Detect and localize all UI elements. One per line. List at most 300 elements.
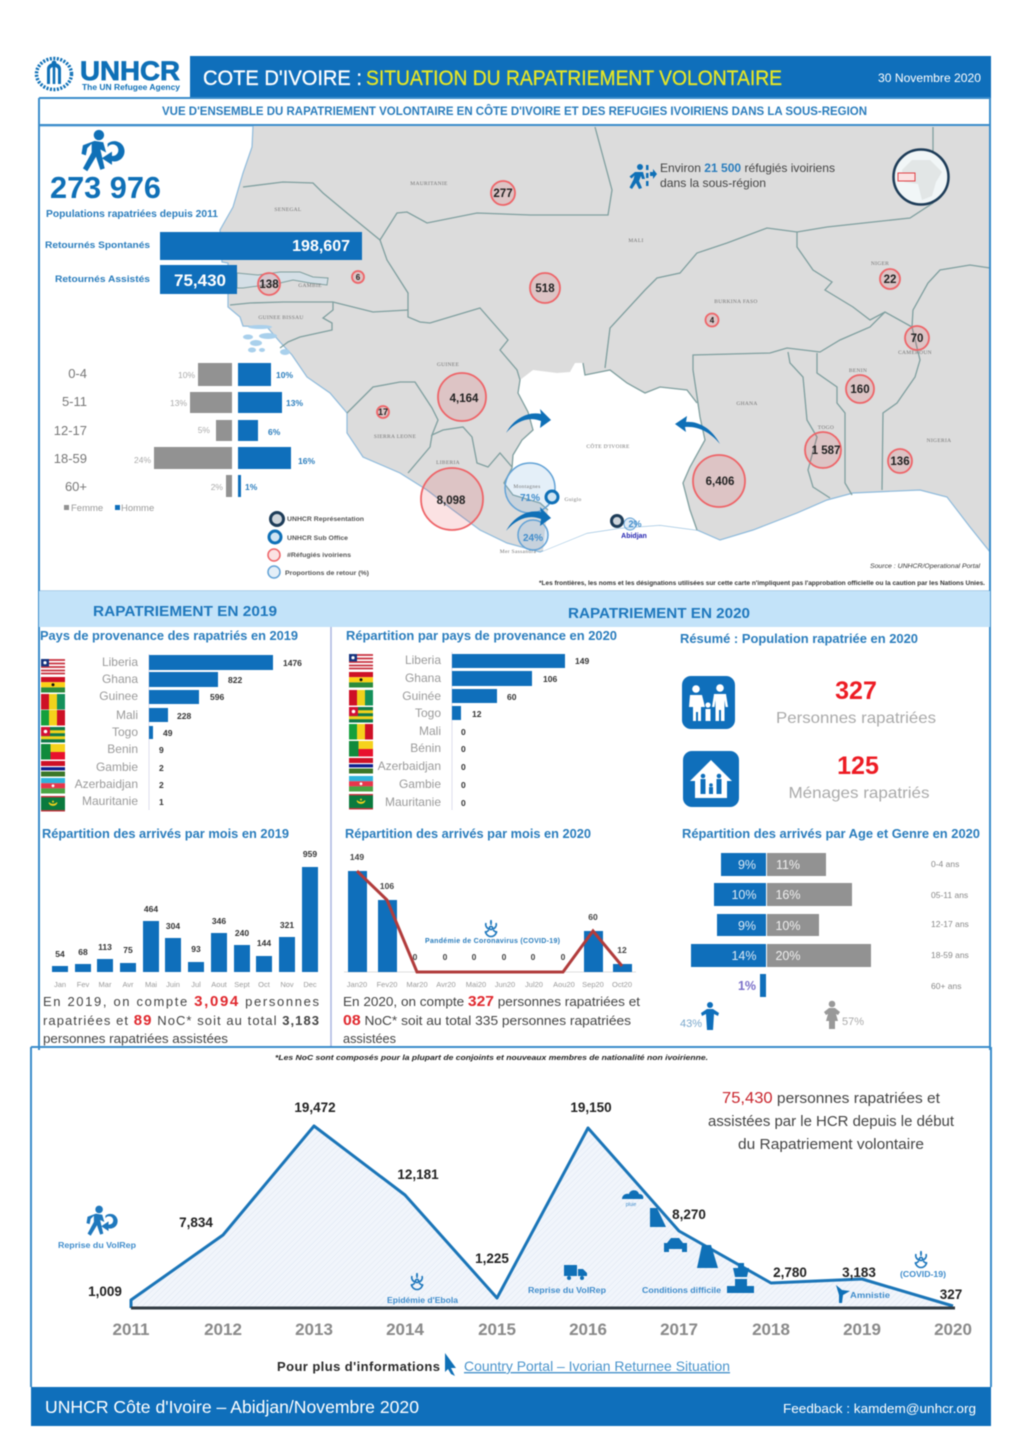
year labels: 2019 [843, 1320, 881, 1339]
area [131, 1126, 953, 1308]
callout: refugees in the sub-region: dans la sous-région [660, 176, 766, 190]
value labels: 1,009 [88, 1284, 122, 1299]
value labels: 2,780 [773, 1265, 807, 1280]
percent labels: 1% [738, 979, 756, 993]
percent labels: 16% [298, 456, 315, 466]
country labels: GAMBIE [298, 283, 322, 289]
year labels: 2015 [478, 1320, 516, 1339]
value labels: 8,270 [672, 1207, 706, 1222]
arrows: return flows [506, 409, 720, 531]
bubble values: 22 [884, 274, 896, 286]
map legend [268, 512, 369, 578]
icon: boat in flood [727, 1263, 754, 1293]
return proportion bubbles [505, 463, 647, 550]
bar chart: 12 [472, 709, 482, 719]
panel: arrivals by age and gender 2020: Répartition des arrivés par Age et Genre en 2020 [682, 826, 980, 841]
title: SITUATION DU RAPATRIEMENT VOLONTAIRE [366, 67, 782, 90]
bar chart [52, 849, 318, 989]
bar chart: Sep20 [582, 980, 604, 989]
icon: returnee walker [82, 130, 125, 171]
country labels: GHANA [736, 401, 758, 407]
event: COVID [900, 1251, 946, 1279]
callout: refugees in the sub-region: Environ 21 500 réfugiés ivoiriens [660, 161, 835, 175]
percent labels [731, 858, 801, 993]
title: COTE D'IVOIRE : [203, 67, 362, 90]
bar chart: 93 [191, 944, 201, 954]
male share [680, 1002, 719, 1030]
percent labels [134, 370, 315, 492]
panel: arrivals by month 2020 [343, 826, 640, 1046]
female bars [154, 363, 232, 497]
country names: Azerbaidjan [75, 777, 138, 791]
bar chart: 1 [159, 797, 164, 807]
bar chart: 2 [159, 763, 164, 773]
refugee bubbles [258, 181, 929, 530]
bubble values: 4 [710, 316, 715, 325]
year labels: 2013 [295, 1320, 333, 1339]
panel: countries 2020 [346, 628, 617, 810]
percent labels: 14% [731, 949, 757, 963]
age labels: 05-11 ans [931, 890, 968, 900]
text block: personnes rapatriées assistées [43, 1031, 229, 1046]
map legend: UNHCR Représentation [287, 517, 364, 523]
panel: countries 2020: Répartition par pays de provenance en 2020 [346, 628, 617, 643]
male share: 43% [680, 1018, 702, 1030]
country: Côte d'Ivoire [504, 363, 705, 551]
bubble values: 1 587 [812, 445, 840, 457]
bubble values [259, 188, 923, 507]
percent labels: 5% [198, 425, 210, 435]
country names: Guinée [402, 689, 441, 703]
bubble values: 138 [259, 279, 279, 291]
bar chart: 321 [280, 920, 294, 930]
bar chart: 0 [531, 952, 536, 962]
icon: biohazard [485, 920, 497, 936]
age labels: 60+ ans [931, 981, 962, 991]
male bars [691, 853, 766, 997]
country names: Gambie [399, 777, 441, 791]
value labels: 1,225 [475, 1251, 509, 1266]
stat: households: 125 [837, 752, 879, 780]
bar chart: 12 [617, 945, 627, 955]
panel: arrivals by age and gender 2020 [680, 826, 980, 1030]
office icons [546, 491, 622, 526]
percent labels: 16% [775, 888, 801, 902]
bar: spontaneous returns: Retournés Spontanés [45, 240, 150, 251]
country names: Liberia [102, 655, 138, 669]
bar chart: Jul [191, 980, 201, 989]
bar chart: Aou20 [553, 980, 575, 989]
text block: assistées [343, 1031, 396, 1046]
bar chart: 596 [210, 692, 224, 702]
bar chart: 959 [303, 849, 317, 859]
population pyramid [54, 363, 315, 514]
percent labels: 24% [134, 455, 151, 465]
bar chart: Mar [99, 980, 112, 989]
panel: arrivals by month 2019: Répartition des arrivés par mois en 2019 [42, 826, 289, 841]
text block [43, 993, 320, 1046]
stat: persons: 327 [835, 677, 877, 705]
event: truck, repatriation resumes: Reprise du VolRep [528, 1286, 606, 1295]
bar chart [344, 852, 636, 989]
bar: spontaneous returns [45, 232, 362, 260]
age labels: 12-17 [54, 423, 87, 438]
header bar [190, 56, 991, 98]
icon: rain cloud [622, 1190, 643, 1208]
bar: spontaneous returns: 198,607 [292, 238, 350, 255]
bar chart: 464 [144, 904, 158, 914]
country labels: CAMEROUN [898, 350, 932, 356]
country names: Togo [112, 725, 138, 739]
panel: arrivals by month 2019 [42, 826, 320, 1046]
footer: Feedback : kamdem@unhcr.org [783, 1401, 976, 1416]
bar chart: Jul20 [525, 980, 543, 989]
country names: Benin [107, 742, 138, 756]
event: Ebola: Epidémie d'Ebola [387, 1296, 459, 1305]
bar chart: 149 [350, 852, 364, 862]
percent labels: 11% [776, 858, 800, 872]
map disclaimer: *Les frontières, les noms et les désignations utilisées sur cette carte n'impliquent pas l'approbation officielle ou la caution par les Nations Unies. [539, 581, 985, 587]
icon: car on road [664, 1238, 687, 1252]
map panel [39, 125, 990, 591]
bar chart: Avr [122, 980, 134, 989]
year labels: 2017 [660, 1320, 698, 1339]
logo: UNHCR: The UN Refugee Agency [82, 83, 181, 92]
bar chart: Oct [258, 980, 271, 989]
more information link: Pour plus d'informations [277, 1359, 440, 1374]
return proportion bubbles: Abidjan [621, 533, 647, 540]
panel: countries 2019 [40, 628, 302, 812]
country names: Guinee [99, 689, 138, 703]
bubble values: 8,098 [437, 495, 466, 507]
title [203, 67, 782, 90]
bar chart: Fev20 [377, 980, 397, 989]
text block: En 2019, on compte 3,094 personnes [43, 993, 320, 1010]
bar chart: 68 [78, 947, 88, 957]
bar: assisted returns: Retournés Assistés [55, 274, 150, 285]
country labels: CÔTE D'IVOIRE [586, 442, 630, 450]
value labels: 3,183 [842, 1265, 876, 1280]
bar: assisted returns [55, 265, 237, 294]
country labels: BURKINA FASO [714, 299, 758, 305]
country names: Mali [419, 724, 441, 738]
event: voluntary repatriation restart [58, 1206, 136, 1250]
year labels: 2011 [113, 1320, 149, 1339]
stat: persons: Personnes rapatriées [776, 710, 936, 727]
bar chart: Sept [234, 980, 251, 989]
bar chart: Nov [280, 980, 294, 989]
country names: Gambie [96, 760, 138, 774]
percent labels: 9% [738, 858, 756, 872]
percent labels: 10% [178, 370, 195, 380]
event: Ebola [387, 1273, 459, 1305]
text block: 08 NoC* soit au total 335 personnes rapatriées [343, 1012, 632, 1029]
footer: UNHCR Côte d'Ivoire – Abidjan/Novembre 2020 [45, 1397, 419, 1417]
bar chart: Oct20 [612, 980, 632, 989]
key figures [45, 130, 362, 294]
country labels: GUINEE [437, 362, 459, 368]
bar chart: Mai [145, 980, 157, 989]
bubble values: 6 [356, 273, 361, 282]
bar chart: 9 [159, 745, 164, 755]
panel: countries 2019: Pays de provenance des rapatriés en 2019 [40, 628, 298, 643]
year labels: 2020 [934, 1320, 972, 1339]
bar chart: 60 [507, 692, 517, 702]
percent labels: 2% [211, 482, 223, 492]
bar chart: 2 [159, 780, 164, 790]
bar chart: Jan20 [347, 980, 367, 989]
country names: Bénin [410, 741, 441, 755]
country labels: SIERRA LEONE [374, 434, 416, 440]
bar chart: Jun20 [495, 980, 515, 989]
value labels: 327 [940, 1287, 962, 1302]
panel: returns per year area chart [58, 1100, 972, 1339]
legend: Homme [121, 503, 154, 514]
event: amnesty [836, 1285, 891, 1303]
bar chart: 49 [163, 728, 173, 738]
year labels: 2014 [386, 1320, 424, 1339]
country names [75, 655, 138, 808]
more information link: Country Portal – Ivorian Returnee Situation [464, 1358, 730, 1374]
bubble values: 6,406 [706, 476, 734, 488]
bubble values: 70 [911, 333, 923, 345]
stat: persons [776, 677, 936, 727]
bar chart: Fev [77, 980, 89, 989]
bar chart: 54 [55, 949, 65, 959]
year labels: 2016 [569, 1320, 607, 1339]
bubble values: 136 [890, 456, 910, 468]
bar chart: 304 [166, 921, 180, 931]
country labels: BENIN [849, 368, 867, 374]
panel: summary 2020 [680, 631, 936, 807]
return proportion bubbles: 71% [520, 493, 540, 504]
female share: 57% [842, 1016, 864, 1028]
age labels: 0-4 ans [931, 859, 959, 869]
callout: total assisted: du Rapatriement volontaire [738, 1136, 924, 1153]
text block: En 2020, on compte 327 personnes rapatriées et [343, 993, 640, 1010]
icon: cursor [445, 1353, 456, 1376]
return proportion bubbles: 2% [628, 519, 642, 529]
callout: refugees in the sub-region [630, 161, 835, 190]
bar chart: 106 [543, 674, 557, 684]
country names: Azerbaidjan [378, 759, 441, 773]
percent labels: 9% [738, 919, 756, 933]
bar chart: 0 [461, 762, 466, 772]
bar: assisted returns: 75,430 [174, 271, 226, 290]
country labels: LIBERIA [436, 460, 460, 466]
Gambia river and Bissau islands [237, 272, 328, 355]
icon: landslide [650, 1208, 666, 1227]
icon: household [683, 751, 739, 807]
value labels: 7,834 [179, 1215, 213, 1230]
country names: Mauritanie [385, 795, 441, 809]
bubble values: 518 [535, 283, 555, 295]
map legend: UNHCR Sub Office [287, 536, 349, 542]
percent labels: 13% [170, 398, 187, 408]
bar chart: 149 [575, 656, 589, 666]
subtitle: VUE D'ENSEMBLE DU RAPATRIEMENT VOLONTAIRE EN CÔTE D'IVOIRE ET DES REFUGIES IVOIRIENS DANS LA SOUS-REGION [162, 103, 867, 118]
age labels: 60+ [65, 479, 87, 494]
percent labels: 13% [286, 398, 303, 408]
event: truck, repatriation resumes [528, 1265, 606, 1295]
age labels: 5-11 [62, 394, 87, 409]
icon: refugee walker [630, 164, 657, 189]
bar chart: 0 [461, 780, 466, 790]
year labels: 2018 [752, 1320, 790, 1339]
map legend: Proportions de retour (%) [285, 571, 369, 577]
age labels: 0-4 [68, 366, 87, 381]
country labels: MALI [628, 238, 644, 244]
band: yearly headings: RAPATRIEMENT EN 2020 [568, 605, 750, 622]
logo: UNHCR [36, 56, 181, 92]
country labels: MAURITANIE [410, 181, 448, 187]
value labels: 12,181 [397, 1167, 439, 1182]
year labels [113, 1320, 972, 1339]
country names: Mali [116, 708, 138, 722]
country names: Liberia [405, 653, 441, 667]
return proportion bubbles: Montagnes [513, 484, 541, 490]
bar chart: 75 [123, 945, 133, 955]
footer [31, 1387, 991, 1426]
bar chart: 106 [380, 881, 394, 891]
female bars [767, 853, 871, 967]
event: amnesty: Amnistie [850, 1291, 891, 1300]
bubble values: 160 [850, 384, 870, 396]
country labels: NIGER [871, 261, 889, 267]
callout: total assisted [708, 1090, 955, 1153]
age labels: 18-59 ans [931, 950, 969, 960]
bar chart: 0 [472, 952, 477, 962]
country names [378, 653, 441, 809]
icon: family [682, 676, 735, 729]
value labels [88, 1100, 962, 1302]
bar chart: 0 [502, 952, 507, 962]
percent labels: 20% [775, 949, 801, 963]
bar chart: 822 [228, 675, 242, 685]
icon: damaged road [697, 1245, 718, 1268]
bar chart [452, 652, 589, 810]
more information link [277, 1353, 730, 1376]
country labels: Mer Sassandra [500, 549, 536, 555]
icon: UNHCR wreath [36, 58, 72, 90]
country names: Ghana [405, 671, 441, 685]
NoC footnote: *Les NoC sont composés pour la plupart de conjoints et nouveaux membres de nationalité non ivoirienne. [275, 1053, 708, 1062]
bar chart: 0 [443, 952, 448, 962]
bar chart: 1476 [283, 658, 302, 668]
bubble values: 4,164 [450, 393, 479, 405]
bar chart: 144 [257, 938, 271, 948]
bar chart: 113 [98, 942, 112, 952]
bar chart: 228 [177, 711, 191, 721]
country labels: GUINEE BISSAU [258, 315, 304, 321]
country labels: SENEGAL [274, 207, 302, 213]
bar chart: 346 [212, 916, 226, 926]
legend: Femme [71, 503, 103, 514]
event: conditions: Conditions difficile [642, 1286, 722, 1295]
bar chart: 60 [588, 912, 598, 922]
bar chart: 0 [461, 727, 466, 737]
stat: households [788, 752, 930, 802]
country names: Ghana [102, 672, 138, 686]
event: voluntary repatriation restart: Reprise du VolRep [58, 1241, 136, 1250]
callout: total assisted: assistées par le HCR depuis le début [708, 1113, 955, 1130]
legend [64, 503, 154, 514]
male bars [238, 363, 291, 497]
bar chart: Dec [303, 980, 317, 989]
ocean [39, 126, 990, 591]
bar chart: 0 [561, 952, 566, 962]
bubble values: 17 [378, 407, 388, 417]
value labels: 19,472 [294, 1100, 336, 1115]
map legend: #Réfugiés ivoiriens [287, 553, 352, 559]
event: COVID: (COVID-19) [900, 1270, 946, 1279]
country labels: Guiglo [564, 497, 582, 503]
icon: rain cloud: pluie [626, 1202, 636, 1208]
country labels [258, 181, 951, 555]
source note: Source : UNHCR/Operational Portal [870, 564, 981, 570]
age labels [931, 859, 969, 991]
bar chart: Avr20 [436, 980, 456, 989]
percent labels: 10% [731, 888, 757, 902]
bar chart: 0 [461, 744, 466, 754]
callout: total assisted: 75,430 personnes rapatriées et [722, 1090, 941, 1107]
logo: UNHCR: UNHCR [80, 56, 180, 86]
bar chart [149, 654, 302, 810]
panel: arrivals by month 2020: Répartition des arrivés par mois en 2020 [345, 826, 591, 841]
band: yearly headings: RAPATRIEMENT EN 2019 [93, 603, 277, 620]
percent labels: 1% [245, 482, 258, 492]
bar chart: Jan [54, 980, 66, 989]
trend line [131, 1126, 953, 1308]
bar chart: Juin [166, 980, 180, 989]
text block [343, 993, 640, 1046]
percent labels: 6% [268, 427, 281, 437]
country labels: NIGERIA [927, 438, 951, 444]
country names: Togo [415, 706, 441, 720]
value labels: 19,150 [570, 1100, 612, 1115]
bar chart: Aout [211, 980, 228, 989]
year labels: 2012 [204, 1320, 242, 1339]
country labels: TOGO [818, 425, 834, 431]
bar chart: 0 [461, 798, 466, 808]
bar chart: 0 [413, 952, 418, 962]
text block: rapatriées et 89 NoC* soit au total 3,183 [43, 1012, 319, 1029]
stat: households: Ménages rapatriés [788, 785, 930, 802]
total returnees: 273 976 [50, 170, 161, 205]
bar chart: 240 [235, 928, 249, 938]
flags [349, 654, 373, 810]
bar chart: Mai20 [466, 980, 486, 989]
age labels: 18-59 [54, 451, 87, 466]
age labels [54, 366, 87, 494]
main frame lines [39, 98, 990, 1050]
percent labels: 10% [775, 919, 801, 933]
panel: summary 2020: Résumé : Population rapatriée en 2020 [680, 631, 918, 646]
flags [41, 659, 65, 812]
age labels: 12-17 ans [931, 919, 969, 929]
band: yearly headings [39, 591, 990, 627]
date: 30 Novembre 2020 [878, 71, 981, 85]
total caption: Populations rapatriées depuis 2011 [46, 209, 218, 220]
bubble values: 277 [493, 188, 513, 200]
lower frame [31, 1047, 991, 1387]
return proportion bubbles: 24% [523, 533, 543, 544]
female share [824, 1001, 864, 1029]
bar chart: Mar20 [406, 980, 428, 989]
percent labels: 10% [276, 370, 293, 380]
annotation: pandemic: Pandémie de Coronavirus (COVID-19) [425, 938, 560, 945]
country names: Mauritanie [82, 794, 138, 808]
